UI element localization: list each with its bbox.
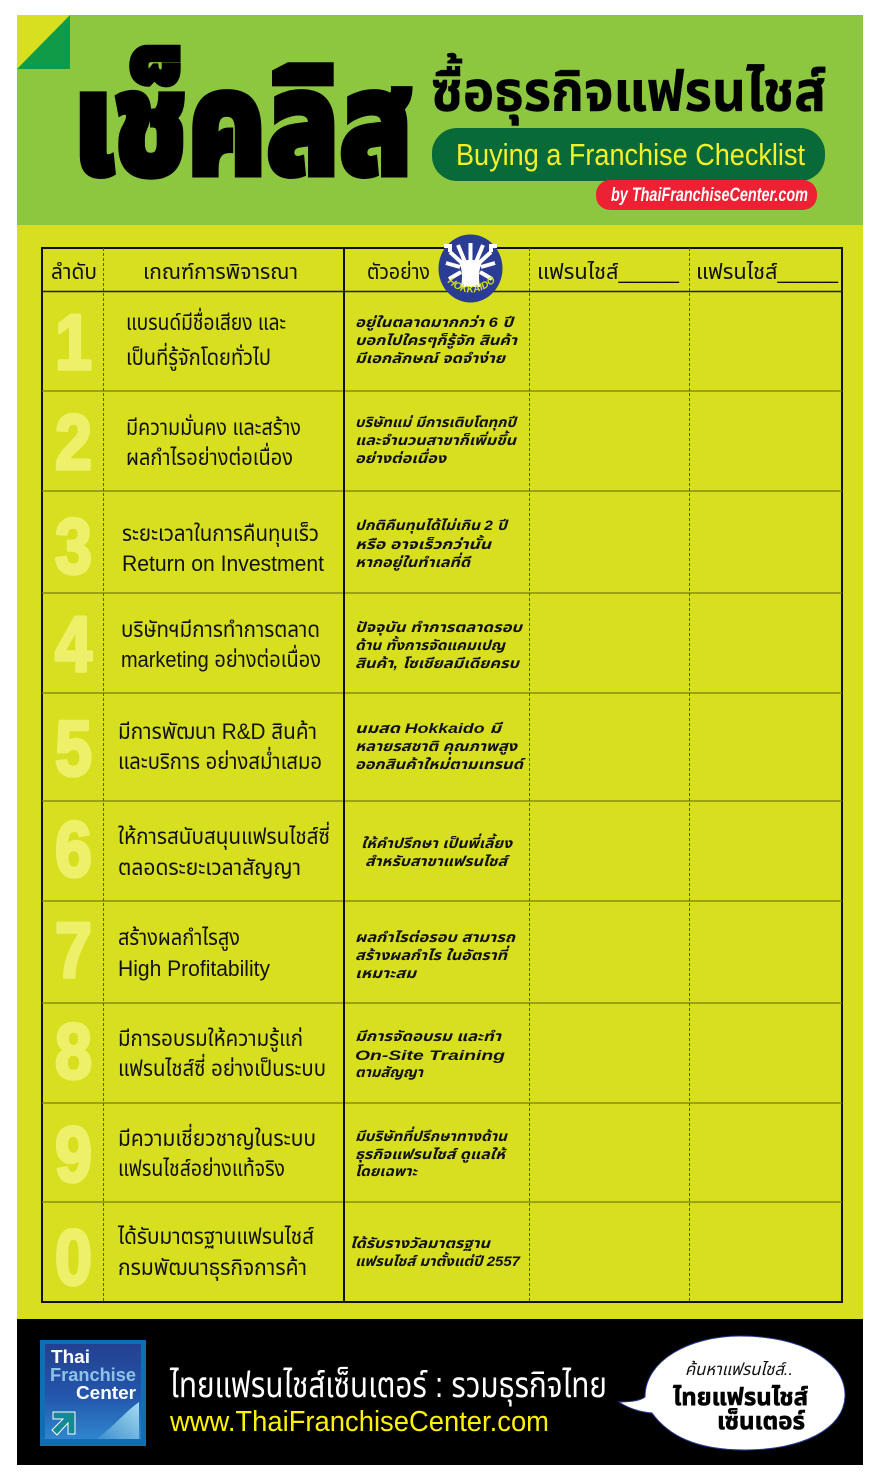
- panel: footer: [17, 1319, 863, 1465]
- examples column: ปัจจุบัน ทำการตลาดรอบ: [355, 619, 523, 636]
- table: checklist grid: [42, 248, 842, 1302]
- criteria column: สร้างผลกำไรสูง: [118, 925, 240, 951]
- criteria column: ผลกำไรอย่างต่อเนื่อง: [126, 442, 293, 470]
- examples column: ปกติคืนทุนได้ไม่เกิน 2 ปี: [355, 517, 509, 534]
- criteria column: มีการอบรมให้ความรู้แก่: [118, 1026, 303, 1052]
- criteria column: Return on Investment: [122, 551, 324, 576]
- table header row: แฟรนไชส์_____: [537, 261, 679, 284]
- examples column: On-Site Training: [355, 1047, 506, 1063]
- criteria column: บริษัทฯมีการทำการตลาด: [121, 617, 320, 642]
- row numbers: 6: [55, 805, 92, 893]
- icon: tree seal: HOKKAIDO: [447, 276, 494, 292]
- examples column: [350, 314, 526, 1269]
- criteria column: มีความมั่นคง และสร้าง: [126, 413, 301, 440]
- badge: english title: [432, 128, 825, 181]
- subtitle: buying a franchise: ซื้อธุรกิจแฟรนไชส์: [431, 52, 826, 126]
- examples column: ผลกำไรต่อรอบ สามารถ: [355, 929, 516, 945]
- examples column: ด้าน ทั้งการจัดแคมเปญ: [355, 635, 506, 653]
- panel: header: [17, 15, 863, 225]
- criteria column: High Profitability: [118, 956, 270, 981]
- criteria column: เป็นที่รู้จักโดยทั่วไป: [126, 342, 271, 371]
- logo: Thai Franchise Center: Franchise: [50, 1365, 136, 1385]
- examples column: มีเอกลักษณ์ จดจำง่าย: [355, 350, 507, 366]
- table header row: ลำดับ: [51, 261, 97, 284]
- examples column: สร้างผลกำไร ในอัตราที่: [355, 945, 510, 963]
- examples column: อยู่ในตลาดมากกว่า 6 ปี: [355, 314, 515, 331]
- criteria column: แบรนด์มีชื่อเสียง และ: [126, 307, 286, 335]
- examples column: เหมาะสม: [355, 965, 417, 981]
- logo: Thai Franchise Center: Center: [76, 1383, 136, 1403]
- logo: Thai Franchise Center: [40, 1340, 146, 1446]
- examples column: ให้คำปรึกษา เป็นพี่เลี้ยง: [361, 833, 513, 851]
- table header row: เกณฑ์การพิจารณา: [143, 261, 298, 284]
- logo: Thai Franchise Center: Thai: [51, 1347, 90, 1367]
- criteria column: มีการพัฒนา R&D สินค้า: [118, 719, 317, 744]
- examples column: นมสด Hokkaido มี: [355, 720, 504, 736]
- criteria column: ตลอดระยะเวลาสัญญา: [118, 855, 301, 880]
- examples column: หลายรสชาติ คุณภาพสูง: [355, 738, 518, 755]
- examples column: หากอยู่ในทำเลที่ดี: [355, 552, 472, 571]
- icon: logo arrow: [52, 1412, 75, 1435]
- examples column: ออกสินค้าใหม่ตามเทรนด์: [355, 756, 526, 772]
- icon: corner fold: [17, 15, 70, 69]
- criteria column: [117, 307, 330, 1281]
- row numbers: [55, 298, 92, 1301]
- criteria column: แฟรนไชส์ซี่ อย่างเป็นระบบ: [118, 1053, 326, 1081]
- criteria column: ได้รับมาตรฐานแฟรนไชส์: [117, 1224, 314, 1249]
- row numbers: 8: [55, 1007, 92, 1095]
- criteria column: กรมพัฒนาธุรกิจการค้า: [118, 1255, 307, 1281]
- criteria column: ให้การสนับสนุนแฟรนไชส์ซี่: [118, 821, 330, 850]
- examples column: บอกไปใครๆก็รู้จัก สินค้า: [355, 332, 518, 349]
- criteria column: มีความเชี่ยวชาญในระบบ: [118, 1123, 316, 1151]
- table header row: [51, 260, 838, 284]
- table header row: ตัวอย่าง: [367, 260, 430, 284]
- row numbers: 0: [55, 1213, 92, 1301]
- row numbers: 4: [55, 600, 92, 688]
- criteria column: แฟรนไชส์อย่างแท้จริง: [118, 1156, 285, 1181]
- examples column: ตามสัญญา: [355, 1064, 424, 1080]
- examples column: มีการจัดอบรม และทำ: [355, 1028, 502, 1044]
- row numbers: 5: [55, 704, 92, 792]
- examples column: สำหรับสาขาแฟรนไชส์: [365, 853, 511, 869]
- examples column: สินค้า, โซเชียลมีเดียครบ: [355, 655, 520, 671]
- badge: by ThaiFranchiseCenter.com: by ThaiFranchiseCenter.com: [611, 185, 808, 206]
- footer url: www.ThaiFranchiseCenter.com: [169, 1406, 549, 1438]
- criteria column: marketing อย่างต่อเนื่อง: [121, 644, 321, 672]
- callout: speech bubble: ค้นหาแฟรนไชส์..: [685, 1360, 793, 1379]
- title: checklist: เช็คลิส: [73, 42, 413, 207]
- criteria column: และบริการ อย่างสม่ำเสมอ: [118, 746, 322, 774]
- icon: tree seal: [438, 234, 502, 302]
- examples column: แฟรนไชส์ มาตั้งแต่ปี 2557: [355, 1251, 521, 1269]
- examples column: มีบริษัทที่ปรึกษาทางด้าน: [355, 1126, 508, 1144]
- examples column: อย่างต่อเนื่อง: [355, 448, 447, 466]
- panel: checklist background: [17, 225, 863, 1319]
- examples column: และจำนวนสาขาก็เพิ่มขึ้น: [355, 430, 517, 448]
- row numbers: 1: [55, 298, 92, 386]
- examples column: ได้รับรางวัลมาตรฐาน: [350, 1235, 491, 1251]
- badge: by ThaiFranchiseCenter.com: [596, 180, 817, 210]
- examples column: ธุรกิจแฟรนไชส์ ดูแลให้: [355, 1146, 507, 1163]
- badge: english title: Buying a Franchise Checklist: [456, 137, 805, 172]
- callout: speech bubble: ไทยแฟรนไชส์: [673, 1384, 808, 1411]
- examples column: บริษัทแม่ มีการเติบโตทุกปี: [355, 414, 518, 431]
- row numbers: 3: [55, 502, 92, 590]
- row numbers: 7: [55, 906, 92, 994]
- row numbers: 2: [55, 398, 92, 486]
- footer Thai heading: ไทยแฟรนไชส์เซ็นเตอร์ : รวมธุรกิจไทย: [169, 1364, 607, 1406]
- table header row: แฟรนไชส์_____: [696, 261, 838, 284]
- callout: speech bubble: เซ็นเตอร์: [717, 1408, 805, 1435]
- examples column: โดยเฉพาะ: [355, 1163, 418, 1179]
- callout: speech bubble: [619, 1336, 845, 1450]
- criteria column: ระยะเวลาในการคืนทุนเร็ว: [122, 521, 319, 547]
- row numbers: 9: [55, 1110, 92, 1198]
- examples column: หรือ อาจเร็วกว่านั้น: [355, 534, 492, 552]
